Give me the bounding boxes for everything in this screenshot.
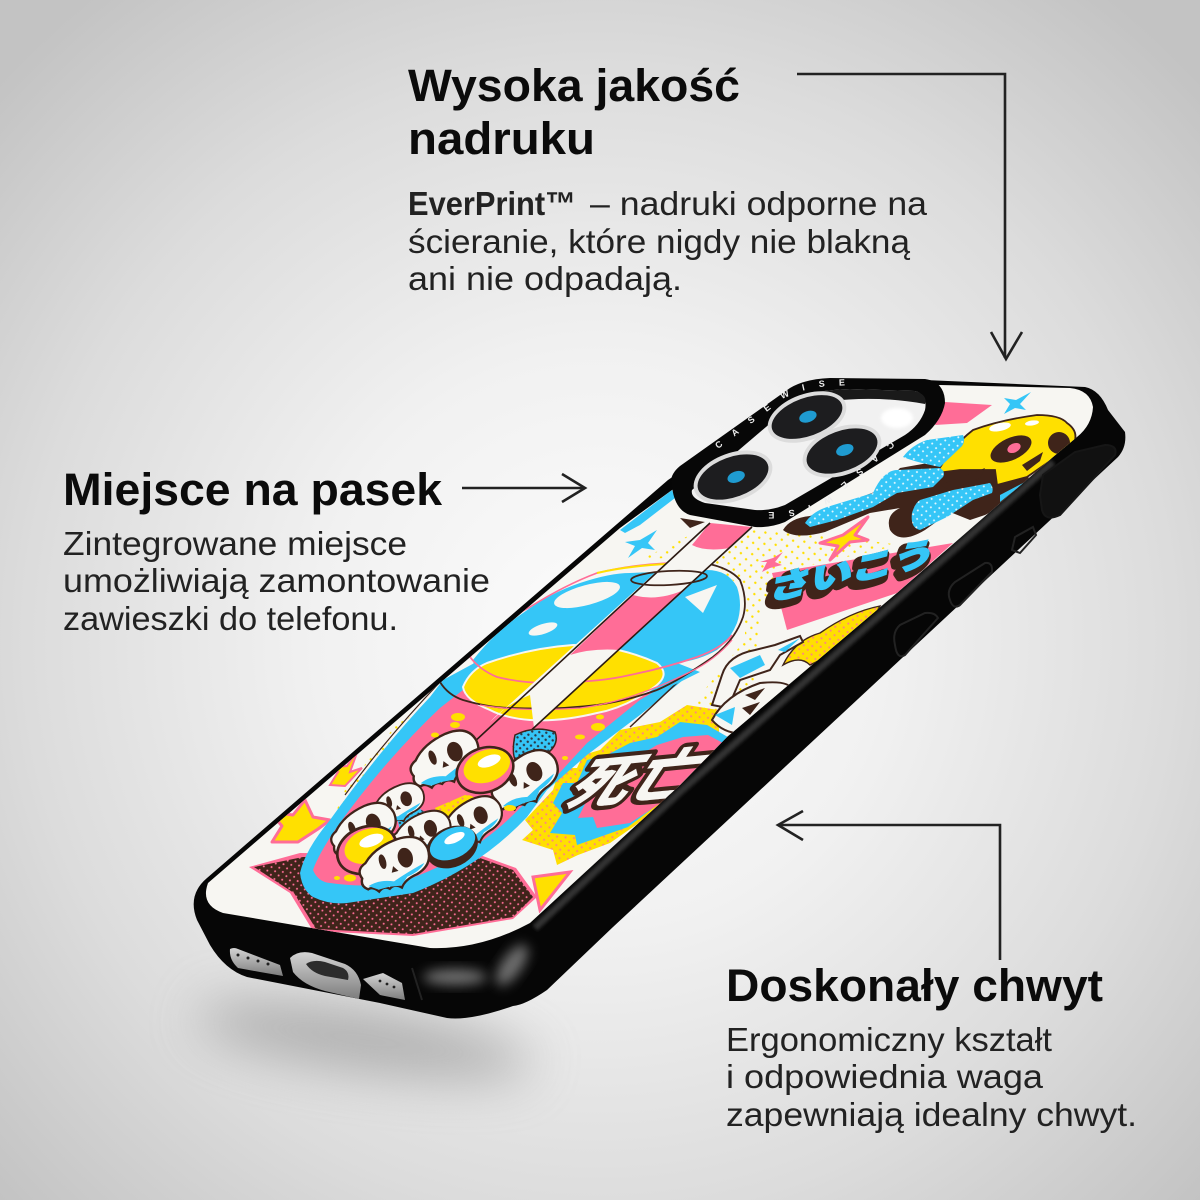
heading: Wysoka jakość (408, 60, 740, 111)
pointing hand (712, 636, 803, 708)
pointing skeleton hand and skull (712, 606, 880, 733)
halftone background (337, 530, 900, 809)
lens left (686, 440, 780, 514)
camera ring (671, 378, 945, 527)
body text (63, 525, 490, 637)
pink triangle with logotype: さいこう (767, 534, 938, 608)
arrow: strap mount (462, 474, 585, 502)
speaker left (230, 948, 283, 976)
usb port (290, 952, 361, 999)
speaker right (363, 973, 405, 1000)
body text: EverPrint™ (408, 185, 576, 222)
artwork printed on case (206, 385, 1093, 948)
body text: ani nie odpadają. (408, 260, 682, 297)
camera glass (692, 389, 926, 510)
pink triangle with logotype (763, 534, 953, 630)
ring lettering (716, 379, 894, 518)
glossy bumper highlights (412, 462, 1053, 1000)
arrow: grip (778, 811, 1000, 960)
side buttons (894, 445, 1116, 656)
body text (726, 1021, 1137, 1133)
sparkle (328, 754, 363, 787)
pink banner top (935, 402, 992, 425)
heading: Miejsce na pasek (63, 464, 443, 515)
yellow skull (937, 415, 1075, 485)
ring lettering: CASEWISE (716, 379, 845, 448)
cup dome (440, 563, 745, 720)
body text: ścieranie, które nigdy nie blakną (408, 223, 911, 260)
flash (881, 408, 913, 428)
callout: strap mount (63, 464, 490, 637)
body text (408, 185, 928, 297)
dome highlights (554, 582, 620, 608)
dome blue fill (473, 570, 740, 700)
hand skull (712, 682, 792, 733)
bottom ports (230, 948, 405, 1000)
phone case body (194, 380, 1125, 1018)
lens right (795, 414, 889, 488)
lens top (761, 381, 853, 453)
camera module (672, 378, 945, 528)
heading (408, 60, 740, 164)
ring lettering: CASEWISE (768, 442, 894, 518)
heading: Doskonały chwyt (726, 960, 1103, 1011)
callout: print quality (408, 60, 928, 297)
halftone patches (513, 729, 556, 765)
horn (783, 606, 880, 665)
cup lower body (300, 660, 683, 903)
star (270, 800, 330, 842)
zigzag burst (522, 705, 733, 910)
kanji title: 死亡 (553, 742, 722, 818)
callout: grip (726, 960, 1137, 1133)
body text: Ergonomiczny kształt (726, 1021, 1052, 1058)
straw (476, 522, 752, 747)
yellow melting skull (783, 415, 1075, 538)
stars left (270, 750, 362, 842)
body text: i odpowiednia waga (726, 1058, 1044, 1095)
top left stripe under camera (620, 490, 705, 533)
dome rims (470, 563, 667, 657)
yellow liquid (463, 645, 664, 720)
body text: zawieszki do telefonu. (63, 600, 398, 637)
body text: umożliwiają zamontowanie (63, 562, 490, 599)
body text: – nadruki odporne na (590, 185, 928, 222)
body text: Zintegrowane miejsce (63, 525, 407, 562)
pink triangle with logotype: さいこう (763, 539, 934, 613)
phone (194, 378, 1126, 1018)
blue drips (903, 435, 964, 467)
phone shadow (192, 987, 538, 1093)
skulls and tapioca balls (324, 713, 605, 897)
heading: nadruku (408, 113, 595, 164)
body text: zapewniają idealny chwyt. (726, 1096, 1137, 1133)
arrow: print quality (797, 74, 1022, 359)
brown drips (783, 460, 1030, 538)
brown halftone base (249, 853, 537, 936)
sparkles (625, 392, 1031, 572)
droplets (334, 713, 605, 882)
